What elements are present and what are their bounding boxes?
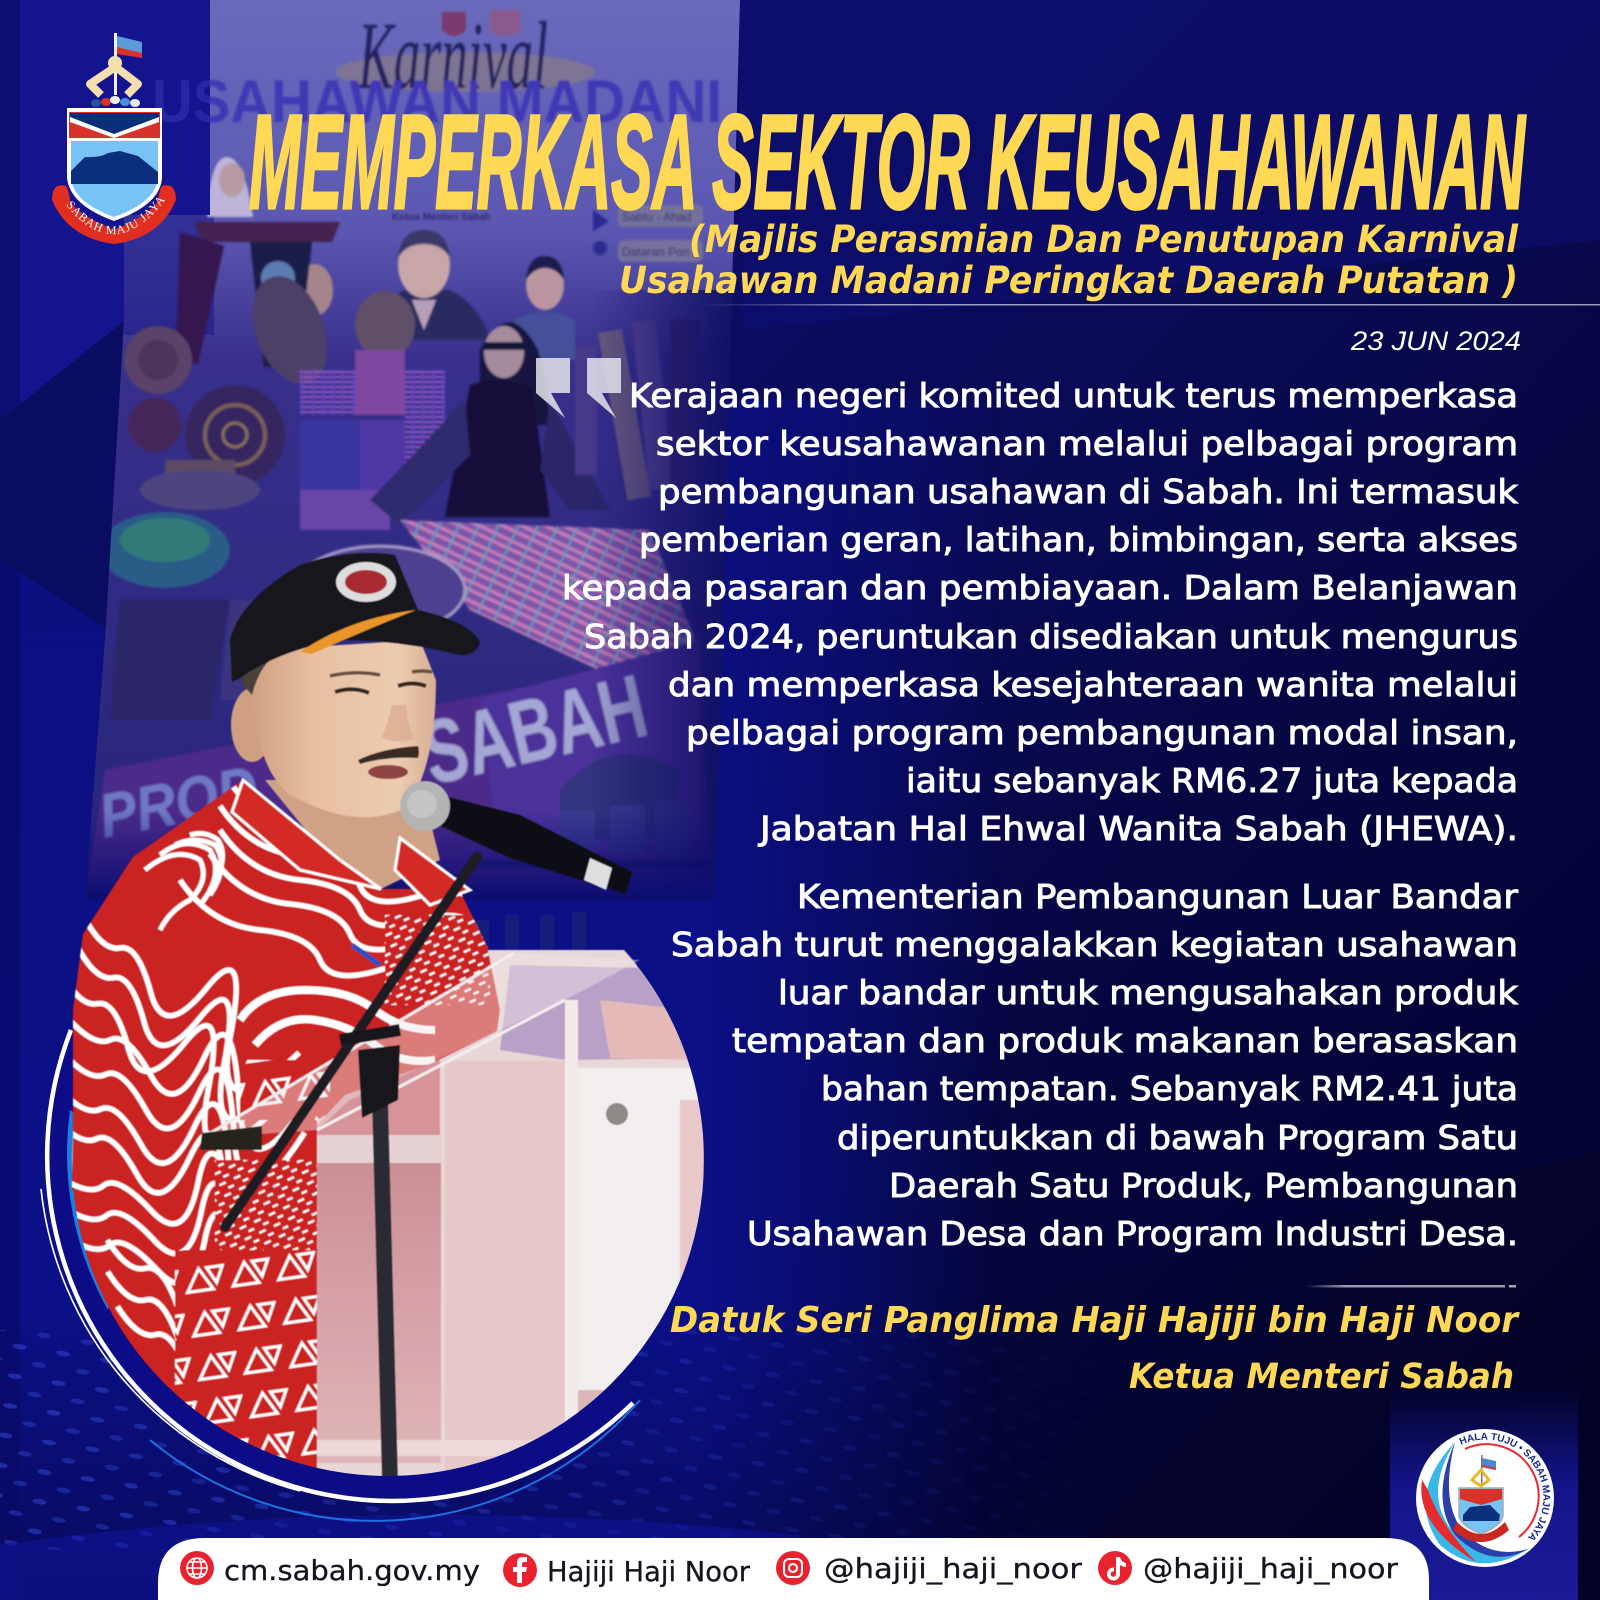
quote paragraph one: pembangunan usahawan di Sabah. Ini termasuk: [658, 473, 1518, 511]
lectern body: [317, 1000, 704, 1480]
date: 23 JUN 2024: [1350, 326, 1521, 356]
board lettering: SABAH: [414, 656, 656, 804]
mouth: [368, 765, 408, 779]
facebook name: Hajiji Haji Noor: [547, 1555, 750, 1588]
attribution: Ketua Menteri Sabah: [1129, 1357, 1514, 1397]
quote paragraph two: luar bandar untuk mengusahakan produk: [778, 974, 1518, 1012]
batik shirt: [23, 780, 500, 1510]
divider: [700, 304, 1600, 306]
woven bags: [300, 350, 445, 530]
poster logos: [442, 10, 520, 36]
ribbon with motto: SABAH MAJU JAYA: [66, 198, 166, 234]
quote paragraph two: bahan tempatan. Sebanyak RM2.41 juta: [821, 1070, 1518, 1108]
woven mats: [400, 520, 700, 680]
icon: facebook: [503, 1553, 537, 1587]
product display board: [85, 660, 715, 900]
attribution: Datuk Seri Panglima Haji Hajiji bin Haji Noor: [670, 1300, 1520, 1341]
website link: cm.sabah.gov.my: [224, 1554, 480, 1587]
nose: [382, 705, 414, 742]
quote paragraph one: iaitu sebanyak RM6.27 juta kepada: [906, 762, 1518, 800]
icon: website globe: [180, 1551, 214, 1585]
basket tray: [100, 470, 320, 720]
beads: [91, 96, 140, 107]
board lettering: PROD: [94, 753, 264, 852]
quote paragraph one: kepada pasaran dan pembiayaan. Dalam Belanjawan: [562, 569, 1518, 607]
head: [231, 640, 436, 817]
swoosh: [1421, 1442, 1530, 1563]
ribbon with motto: [52, 185, 176, 244]
shirt collar: [232, 780, 470, 905]
raised arms: [90, 60, 138, 95]
icon: tiktok: [1098, 1551, 1132, 1585]
shield: [67, 108, 162, 221]
disc backdrop: [60, 950, 720, 1490]
attribution: [670, 1300, 1520, 1397]
icon: instagram: [776, 1551, 810, 1585]
poster date tags: Dataran Pon: [622, 245, 689, 259]
flag: [114, 33, 142, 95]
poster caption: Ketua Menteri Sabah: [392, 212, 491, 223]
quote paragraph one: Sabah 2024, peruntukan disediakan untuk mengurus: [584, 618, 1518, 656]
moustache: [358, 746, 419, 764]
event heading overlay: USAHAWAN MADANI: [152, 68, 722, 135]
poster date tags: [593, 205, 703, 262]
poster swoosh: [335, 52, 595, 92]
quote paragraph two: Daerah Satu Produk, Pembangunan: [889, 1167, 1518, 1205]
footer social bar: [158, 1538, 1429, 1600]
white ring arcs and disc backing: [41, 1030, 640, 1521]
quote paragraph two: Sabah turut menggalakkan kegiatan usahawan: [671, 926, 1518, 964]
quote paragraph one: Kerajaan negeri komited untuk terus memperkasa: [629, 377, 1518, 415]
badge: Hala Tuju Sabah Maju Jaya: [1416, 1429, 1554, 1567]
bottles below board: [475, 912, 586, 960]
photo of speaker at lectern: [23, 553, 720, 1510]
subtitle: [619, 218, 1519, 302]
tiktok handle: @hajiji_haji_noor: [1143, 1552, 1399, 1585]
quote paragraph two: Kementerian Pembangunan Luar Bandar: [797, 878, 1519, 916]
signature rule: [1306, 1285, 1516, 1288]
black cap: [230, 553, 480, 682]
quote paragraph one: dan memperkasa kesejahteraan wanita melalui: [668, 666, 1518, 704]
instagram handle: @hajiji_haji_noor: [824, 1552, 1083, 1585]
event poster heading: USAHAWAN MADANI: [152, 68, 722, 135]
mini crest: [1453, 1455, 1509, 1542]
state crest: [52, 33, 176, 244]
stall woman in hijab: [370, 322, 610, 525]
quote paragraph one: Jabatan Hal Ehwal Wanita Sabah (JHEWA).: [758, 810, 1518, 848]
background event photo: [85, 0, 745, 900]
neck: [265, 780, 440, 889]
microphone and stand: [225, 781, 632, 1480]
hanging baskets: [123, 275, 416, 482]
quote paragraph two: Usahawan Desa dan Program Industri Desa.: [747, 1215, 1518, 1253]
fabric rolls: [575, 319, 700, 501]
quote paragraph one: sektor keusahawanan melalui pelbagai program: [656, 425, 1518, 463]
event script title: Karnival: [357, 2, 548, 109]
product shelf: [480, 800, 720, 868]
dotted wave pattern: [0, 1330, 1120, 1600]
subtitle: (Majlis Perasmian Dan Penutupan Karnival: [689, 218, 1519, 261]
subtitle: Usahawan Madani Peringkat Daerah Putatan ): [619, 259, 1518, 302]
quote paragraph two: tempatan dan produk makanan berasaskan: [732, 1022, 1518, 1060]
quote paragraph one: pemberian geran, latihan, bimbingan, serta akses: [639, 521, 1518, 559]
quote paragraph two: diperuntukkan di bawah Program Satu: [837, 1119, 1518, 1157]
woman at podium: [176, 157, 340, 367]
quote paragraph one: pelbagai program pembangunan modal insan,: [686, 714, 1518, 752]
quote paragraph two: [671, 878, 1519, 1253]
quote paragraph one: [562, 377, 1518, 848]
clear lectern: [200, 953, 704, 1481]
poster portraits: [297, 230, 575, 360]
poster date tags: Sabtu - Ahad: [622, 210, 691, 224]
badge: Hala Tuju Sabah Maju Jaya: HALA TUJU • SABAH MAJU JAYA: [1459, 1432, 1550, 1540]
icon: quote marks: [536, 358, 621, 418]
translucent top plate: [202, 953, 640, 1138]
brows and eyes: [330, 671, 432, 676]
pen in pocket: [352, 945, 380, 965]
bottom right panel: [1390, 1390, 1578, 1600]
